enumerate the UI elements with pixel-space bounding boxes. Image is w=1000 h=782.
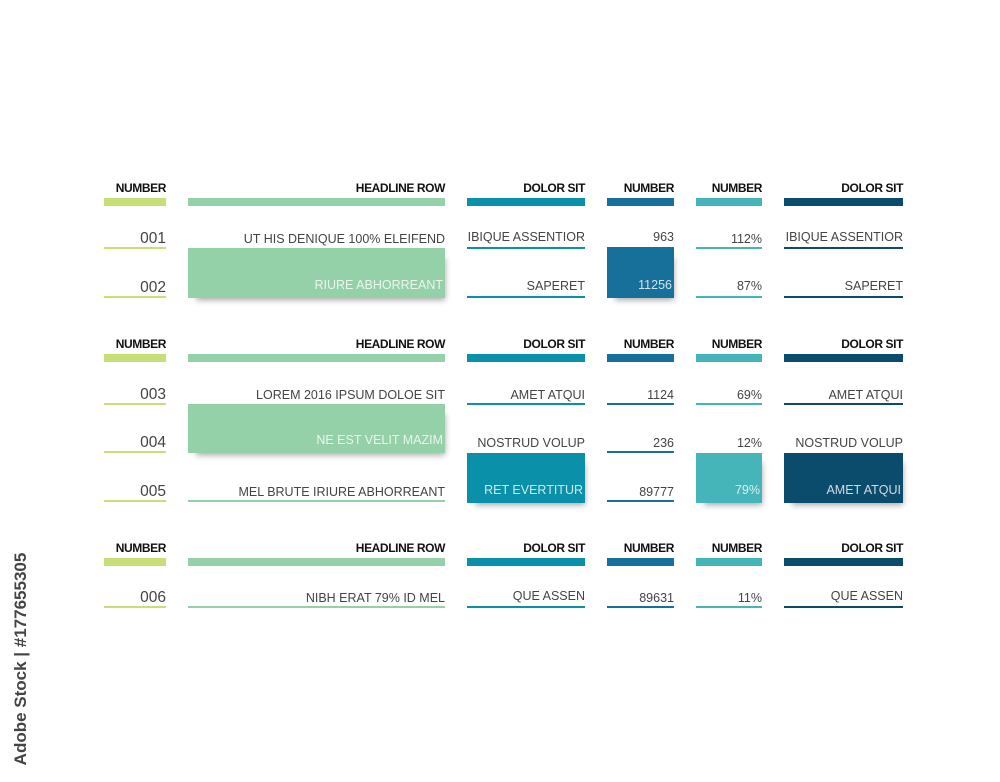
- row 002: 87%: [737, 279, 762, 293]
- section 2 headers: HEADLINE ROW: [356, 337, 445, 351]
- row 003: 1124: [647, 388, 674, 402]
- row 004: NOSTRUD VOLUP: [477, 436, 585, 450]
- row 001: [104, 230, 903, 249]
- row 001: UT HIS DENIQUE 100% ELEIFEND: [244, 232, 445, 246]
- row 003: AMET ATQUI: [510, 388, 585, 402]
- section 1 headers: NUMBER: [624, 181, 674, 195]
- row 006: 11%: [738, 591, 762, 605]
- section 2: [104, 337, 907, 509]
- box: ne est velit mazim: NE EST VELIT MAZIM: [316, 433, 443, 447]
- row 001: IBIQUE ASSENTIOR: [786, 230, 903, 244]
- section 3: [104, 541, 904, 608]
- section 3 headers: NUMBER: [624, 541, 674, 555]
- row 003: 69%: [737, 388, 762, 402]
- row 003: [104, 386, 903, 405]
- row 002: 002: [140, 279, 166, 296]
- section 3 headers: DOLOR SIT: [523, 541, 585, 555]
- section 2 headers: DOLOR SIT: [841, 337, 903, 351]
- box: riure abhorreant: RIURE ABHORREANT: [314, 278, 443, 292]
- row 002: [104, 248, 903, 304]
- watermark: adobe stock id: Adobe Stock | #177655305: [11, 553, 30, 765]
- section 2 headers: NUMBER: [116, 337, 166, 351]
- section 1 headers: [104, 181, 904, 206]
- row 004: 12%: [737, 436, 762, 450]
- section 3 headers: DOLOR SIT: [841, 541, 903, 555]
- row 003: LOREM 2016 IPSUM DOLOE SIT: [256, 388, 445, 402]
- section 1 headers: DOLOR SIT: [841, 181, 903, 195]
- section 2 headers: NUMBER: [624, 337, 674, 351]
- row 004: [104, 404, 903, 459]
- section 3 headers: [104, 541, 904, 566]
- box: 11256: 11256: [638, 278, 672, 292]
- row 006: [104, 589, 903, 608]
- section 3 headers: NUMBER: [116, 541, 166, 555]
- row 001: IBIQUE ASSENTIOR: [468, 230, 585, 244]
- section 2 headers: [104, 337, 904, 362]
- row 004: NOSTRUD VOLUP: [795, 436, 903, 450]
- row 003: 003: [140, 386, 166, 403]
- box: ret evertitur: RET EVERTITUR: [484, 483, 583, 497]
- row 002: SAPERET: [845, 279, 903, 293]
- row 001: 001: [140, 230, 166, 247]
- row 005: [104, 453, 907, 509]
- row 001: 963: [653, 230, 674, 244]
- section 2 headers: DOLOR SIT: [523, 337, 585, 351]
- section 1 headers: NUMBER: [116, 181, 166, 195]
- row 006: NIBH ERAT 79% ID MEL: [306, 591, 445, 605]
- row 005: 89777: [639, 485, 674, 499]
- box: ne est velit mazim: [188, 404, 445, 453]
- section 3 headers: HEADLINE ROW: [356, 541, 445, 555]
- section 1: [104, 181, 904, 304]
- row 005: 005: [140, 483, 166, 500]
- row 003: AMET ATQUI: [828, 388, 903, 402]
- box: 79%: 79%: [735, 483, 760, 497]
- section 1 headers: HEADLINE ROW: [356, 181, 445, 195]
- section 1 headers: NUMBER: [712, 181, 762, 195]
- box: riure abhorreant: [188, 248, 445, 298]
- row 001: 112%: [731, 232, 762, 246]
- box: 11256: [607, 248, 674, 298]
- row 002: SAPERET: [527, 279, 585, 293]
- box: amet atqui: AMET ATQUI: [826, 483, 901, 497]
- section 1 headers: DOLOR SIT: [523, 181, 585, 195]
- row 006: QUE ASSEN: [831, 589, 903, 603]
- box: ret evertitur: [467, 453, 585, 503]
- box: amet atqui: [784, 453, 903, 503]
- row 005: MEL BRUTE IRIURE ABHORREANT: [238, 485, 445, 499]
- row 006: QUE ASSEN: [513, 589, 585, 603]
- box: 79%: [696, 453, 762, 503]
- section 3 headers: NUMBER: [712, 541, 762, 555]
- row 004: 236: [653, 436, 674, 450]
- section 2 headers: NUMBER: [712, 337, 762, 351]
- row 006: 006: [140, 589, 166, 606]
- row 006: 89631: [639, 591, 674, 605]
- row 004: 004: [140, 434, 166, 451]
